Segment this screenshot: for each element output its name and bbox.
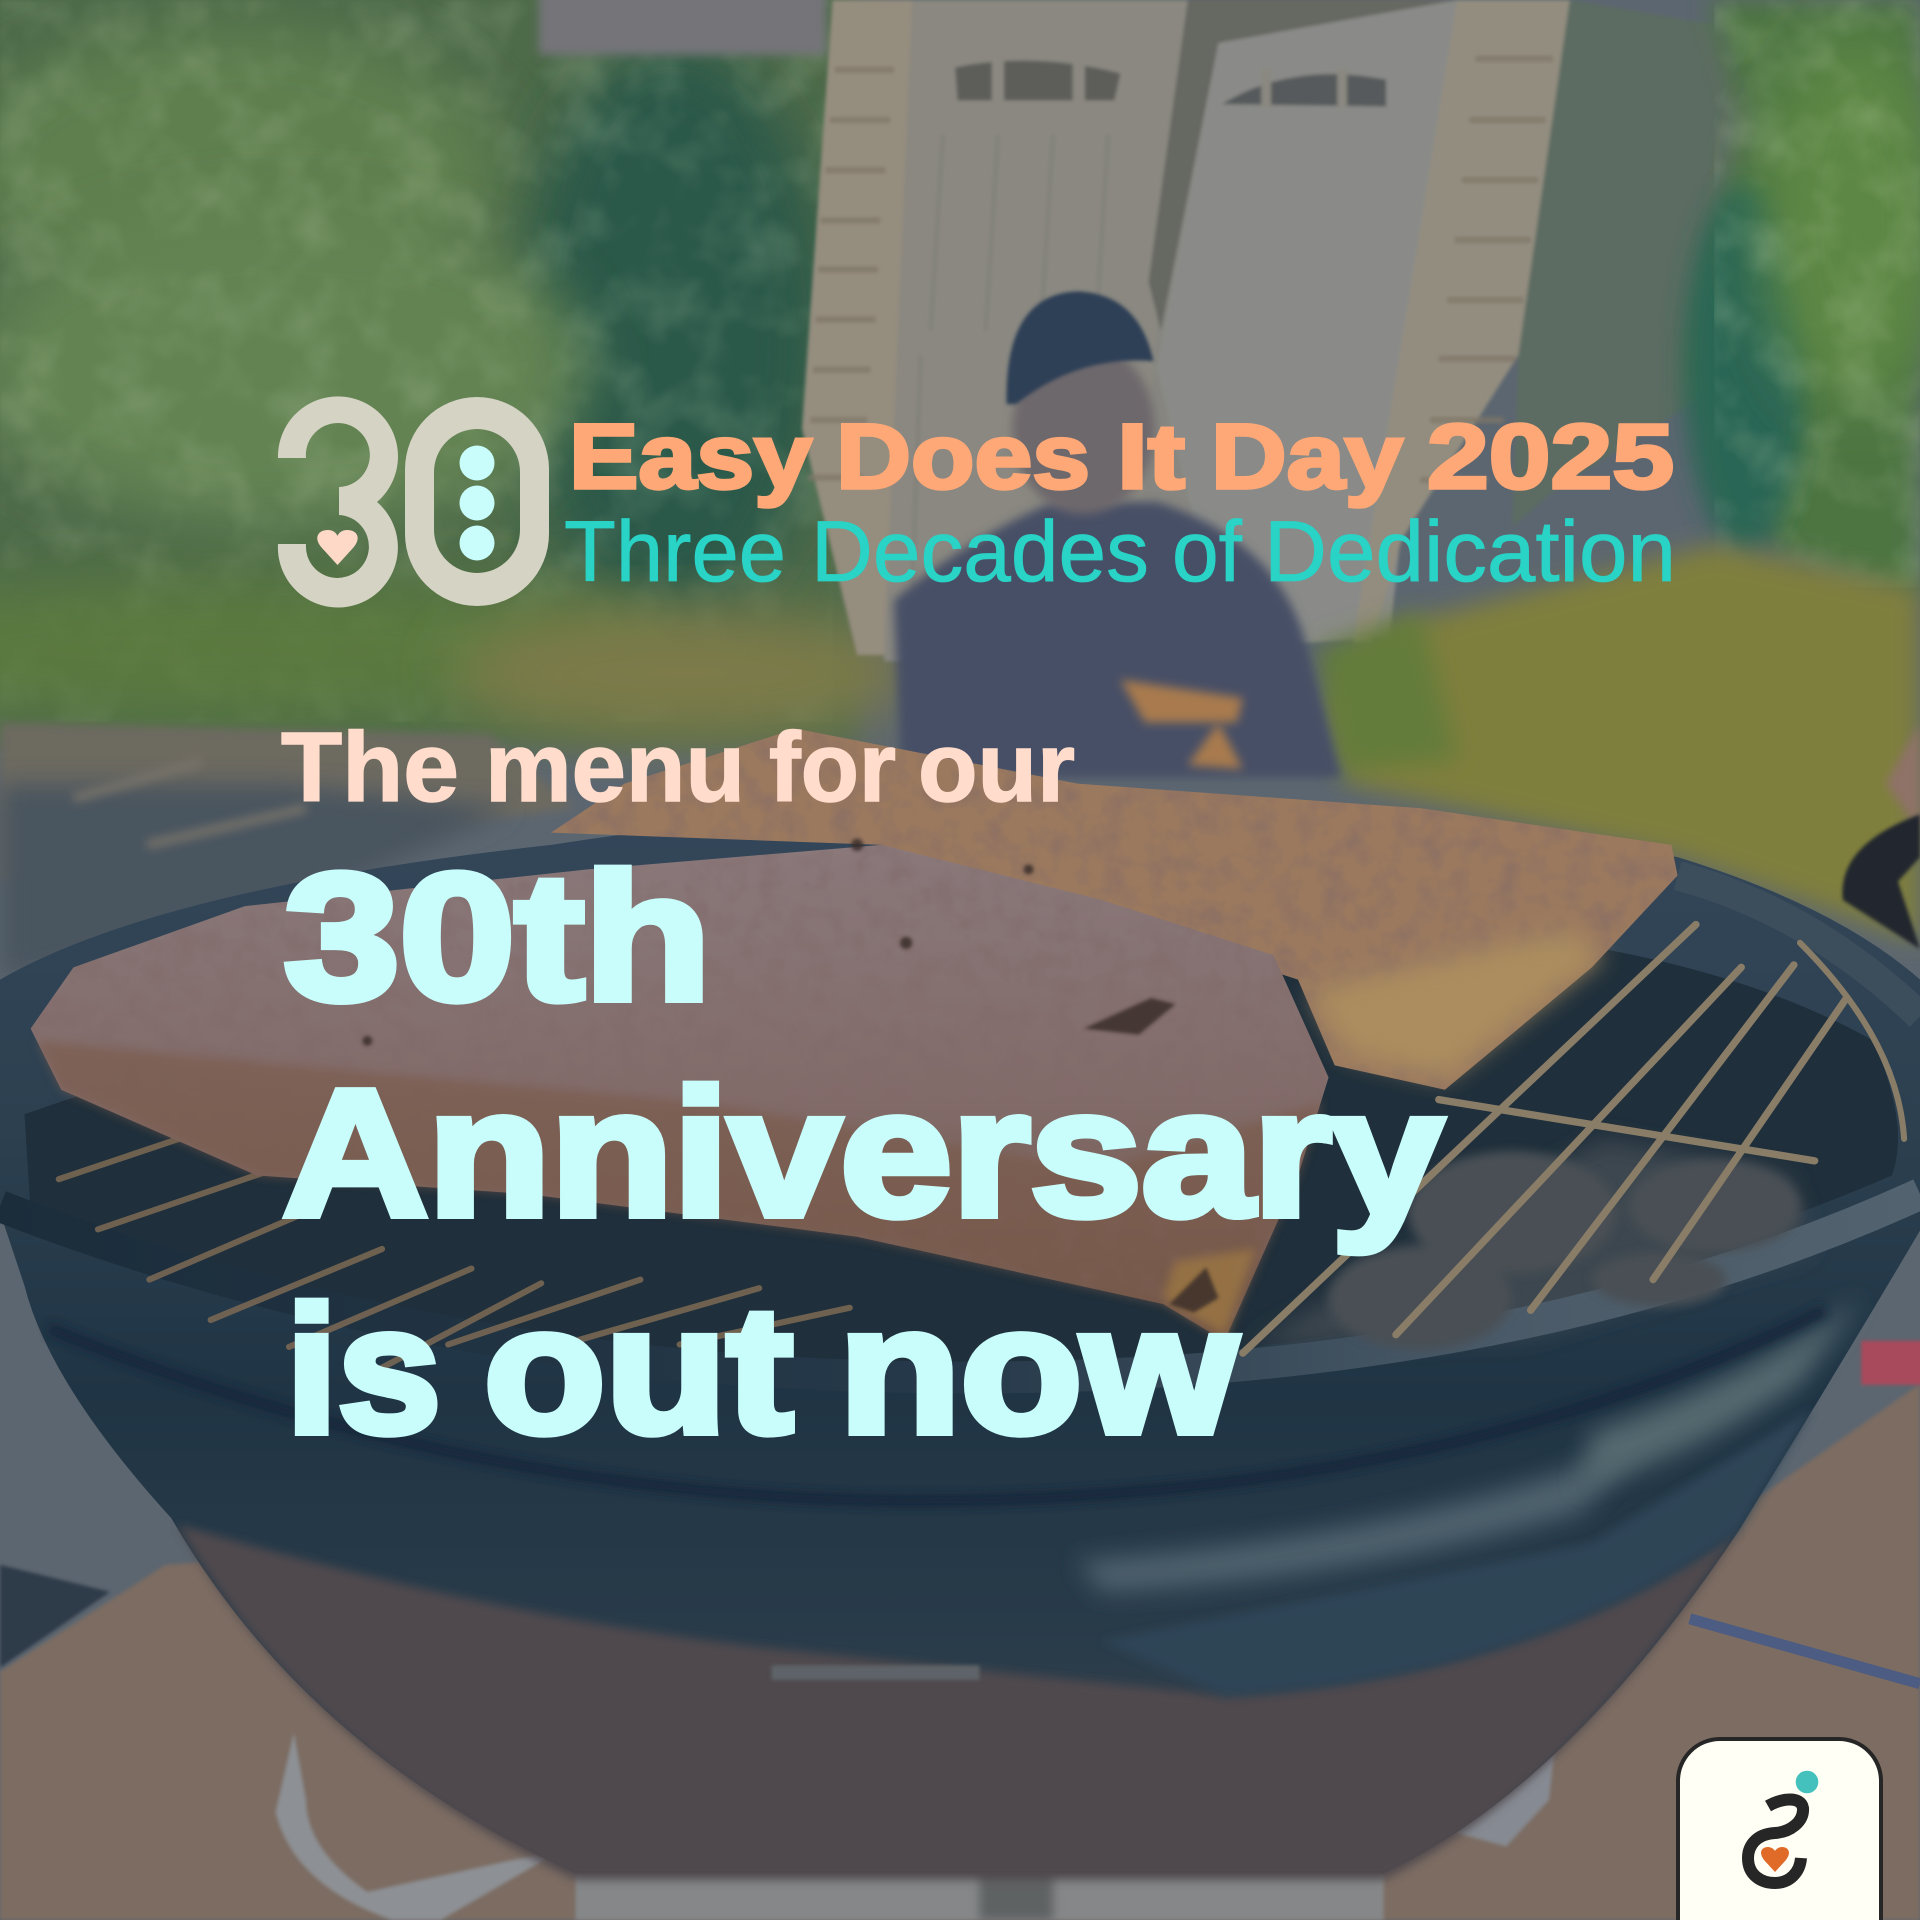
heart xyxy=(1761,1847,1789,1872)
subheading: three decades: Decades xyxy=(811,504,1149,600)
grill stand legs xyxy=(276,1733,1555,1920)
subheading: three decades: Three xyxy=(564,504,786,600)
heading: event name xyxy=(569,406,1674,508)
brand badge xyxy=(1678,1739,1881,1920)
heart in 3 xyxy=(317,530,358,565)
intro line: our xyxy=(918,712,1075,822)
foliage: right hedge xyxy=(1684,0,1920,600)
main headline xyxy=(283,837,1443,1471)
teal dot xyxy=(1796,1771,1818,1793)
dry grass xyxy=(1329,545,1920,943)
badge card xyxy=(1678,1739,1881,1920)
road left xyxy=(0,722,576,980)
heading: event name: It xyxy=(1117,406,1185,508)
heading: event name: Easy xyxy=(569,406,812,508)
grill interior xyxy=(24,919,1898,1371)
numeral 3 with heart xyxy=(278,396,398,608)
rim xyxy=(0,1194,1920,1378)
coals xyxy=(1329,1151,1800,1349)
swirl mark xyxy=(1748,1800,1803,1883)
intro line: for xyxy=(769,712,896,822)
heading: event name: Day xyxy=(1211,406,1403,508)
main headline: Anniversary xyxy=(283,1053,1443,1254)
heading: event name: 2025 xyxy=(1427,406,1674,508)
subheading: three decades: of xyxy=(1172,504,1243,600)
meat: front slab xyxy=(24,833,1347,1347)
intro line: menu xyxy=(485,712,745,822)
grate bars xyxy=(59,924,1904,1369)
subheading: three decades xyxy=(564,504,1676,600)
anniversary logo: 30 xyxy=(278,396,549,608)
table xyxy=(0,1341,1920,1920)
main headline: now xyxy=(839,1270,1238,1471)
main headline: out xyxy=(484,1270,793,1471)
garden shed xyxy=(802,0,1749,661)
numeral 0 with dots xyxy=(405,397,549,606)
foliage: left hedge xyxy=(0,0,918,747)
heading: event name: Does xyxy=(836,406,1090,508)
intro line: The xyxy=(281,712,459,822)
intro line xyxy=(281,712,1075,822)
grill bowl xyxy=(0,805,1920,1880)
subheading: three decades: Dedication xyxy=(1264,504,1676,600)
main headline: 30th xyxy=(284,837,711,1038)
meat: rear slab xyxy=(539,722,1690,1102)
main headline: is xyxy=(286,1270,441,1471)
person's arm at right edge xyxy=(1842,722,1920,949)
man behind grill xyxy=(894,291,1341,778)
